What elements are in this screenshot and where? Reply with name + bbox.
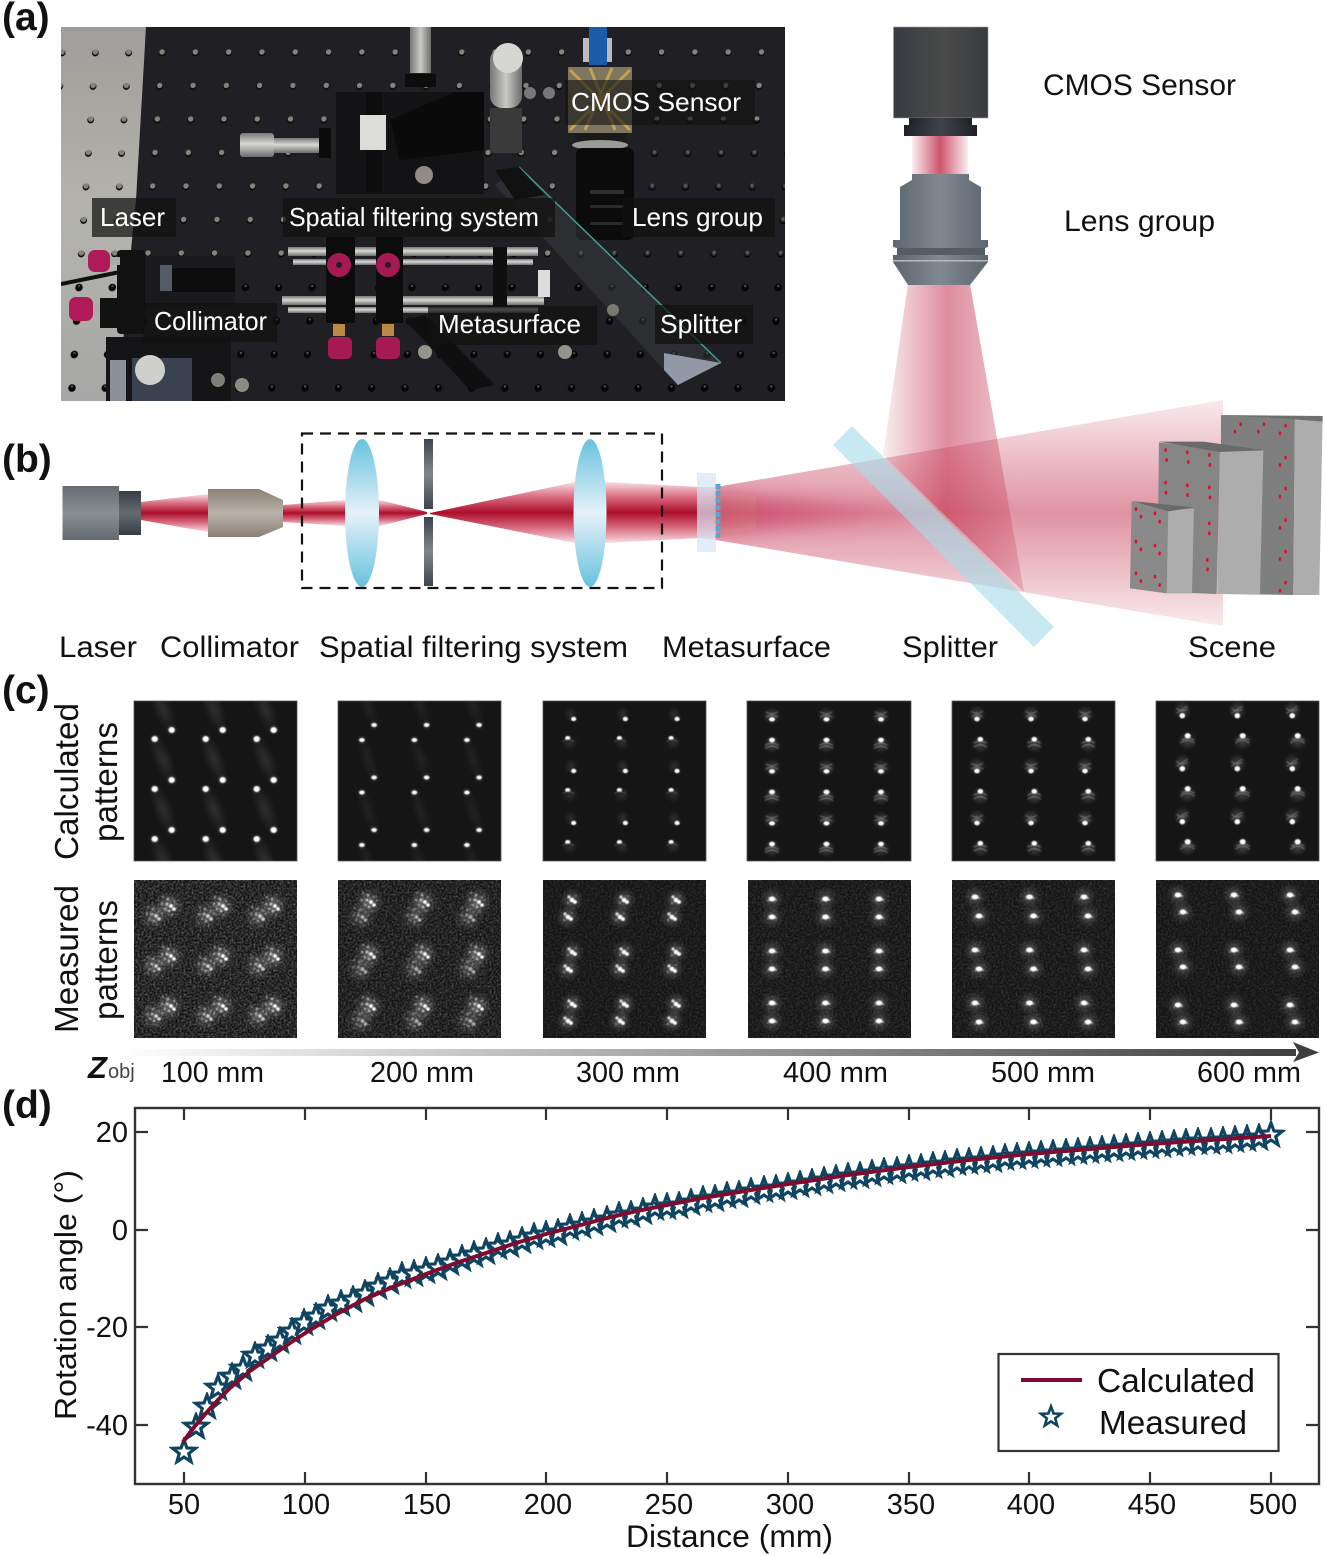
panel label: d: (d) xyxy=(2,1084,52,1127)
lower clamps xyxy=(405,304,619,390)
measured 600 mm xyxy=(1156,880,1319,1038)
lens barrel xyxy=(576,148,634,240)
legend xyxy=(998,1354,1278,1451)
axis label: Z obj: Z xyxy=(87,1050,108,1085)
calculated patterns row xyxy=(134,701,1319,861)
x tick labels: 500 xyxy=(1249,1489,1297,1521)
beam: between sensor and lens group xyxy=(912,135,968,175)
lower left stage xyxy=(106,337,249,401)
collimator xyxy=(208,489,283,537)
x tick labels: 50 xyxy=(168,1489,200,1521)
distance labels: 400 mm xyxy=(783,1057,888,1089)
beam: reflected up to lens xyxy=(883,284,1024,592)
arrow: object distance gradient xyxy=(120,1042,1319,1062)
schematic labels: bottom row: Metasurface xyxy=(662,631,831,664)
x tick labels xyxy=(168,1489,1297,1521)
panel label: b: (b) xyxy=(2,438,52,481)
CMOS sensor camera xyxy=(894,27,988,136)
micrometer top xyxy=(405,27,436,87)
schematic labels: camera: CMOS Sensor xyxy=(1043,69,1236,102)
schematic labels: bottom row xyxy=(59,631,1276,664)
row label: calculated patterns xyxy=(48,703,124,860)
lens 2 xyxy=(574,439,606,587)
distance labels: 100 mm xyxy=(161,1057,264,1089)
schematic labels: bottom row: Scene xyxy=(1188,631,1276,664)
calculated 100 mm xyxy=(134,701,297,861)
schematic labels: bottom row: Spatial filtering system xyxy=(319,631,628,664)
photo labels: Lens group xyxy=(632,202,763,232)
laser xyxy=(62,486,141,540)
optical rails xyxy=(282,247,550,313)
distance labels xyxy=(161,1057,1301,1089)
x tick labels: 150 xyxy=(403,1489,451,1521)
distance labels: 300 mm xyxy=(576,1057,680,1089)
photo labels: CMOS Sensor xyxy=(571,87,741,117)
plot frame and ticks xyxy=(135,1108,1319,1484)
distance labels: 600 mm xyxy=(1197,1057,1301,1089)
schematic labels: bottom row: Collimator xyxy=(160,631,299,664)
axis titles: Rotation angle (°) xyxy=(48,1170,83,1420)
photo labels: Splitter xyxy=(660,309,742,339)
splitter xyxy=(833,426,1054,647)
measured patterns row xyxy=(134,880,1319,1038)
schematic labels: camera xyxy=(1043,69,1236,238)
row label: measured patterns: Measured xyxy=(48,885,85,1033)
calculated 300 mm xyxy=(543,701,706,861)
collimator mount xyxy=(61,250,235,334)
distance labels: 200 mm xyxy=(370,1057,474,1089)
panel label: c: (c) xyxy=(2,669,50,712)
measured 300 mm xyxy=(543,880,706,1038)
panel a: photograph of optical setup xyxy=(61,27,785,401)
beam path: laser to metasurface xyxy=(141,482,716,543)
scene buildings xyxy=(1130,415,1323,595)
line chart: rotation angle vs distance xyxy=(48,1108,1319,1554)
axis label: Z obj: obj xyxy=(108,1061,135,1083)
row label: calculated patterns: Calculated xyxy=(48,703,85,860)
calculated 500 mm xyxy=(952,701,1115,861)
x tick labels: 400 xyxy=(1007,1489,1055,1521)
row label: measured patterns xyxy=(48,885,124,1033)
x tick labels: 450 xyxy=(1128,1489,1176,1521)
measured series: stars xyxy=(184,1135,1271,1452)
calculated 400 mm xyxy=(747,701,911,861)
photo labels: Collimator xyxy=(154,306,267,336)
axis titles xyxy=(48,1170,833,1554)
beam: projected to scene xyxy=(700,400,1223,626)
legend: Calculated xyxy=(1097,1363,1255,1400)
lens posts and knobs xyxy=(326,237,403,359)
x tick labels: 300 xyxy=(766,1489,814,1521)
y tick labels: 20 xyxy=(96,1117,128,1149)
measured 200 mm xyxy=(338,880,501,1038)
splitter plate xyxy=(495,167,721,385)
measured 400 mm xyxy=(748,880,911,1038)
schematic labels: bottom row: Splitter xyxy=(902,631,998,664)
y tick labels: -40 xyxy=(86,1410,128,1442)
camera frame xyxy=(568,67,632,150)
translation stage xyxy=(336,92,484,194)
metasurface xyxy=(697,473,718,552)
photo labels xyxy=(92,80,775,345)
measured 100 mm xyxy=(134,880,297,1038)
schematic labels: camera: Lens group xyxy=(1064,205,1215,238)
lens group xyxy=(893,174,988,285)
projected red dots xyxy=(1135,422,1287,593)
photo labels: Metasurface xyxy=(438,309,581,339)
distance labels: 500 mm xyxy=(991,1057,1095,1089)
y tick labels: -20 xyxy=(86,1312,128,1344)
schematic labels: bottom row: Laser xyxy=(59,631,137,664)
y tick labels: 0 xyxy=(112,1215,128,1247)
measured 500 mm xyxy=(952,880,1115,1038)
axis titles: Distance (mm) xyxy=(626,1518,833,1554)
micrometer left xyxy=(240,128,331,158)
row label: calculated patterns: patterns xyxy=(87,722,124,842)
axis label: Z obj xyxy=(87,1050,135,1085)
calculated 200 mm xyxy=(338,701,501,861)
row label: measured patterns: patterns xyxy=(87,900,124,1020)
x tick labels: 200 xyxy=(524,1489,572,1521)
camera connector xyxy=(583,27,612,65)
x tick labels: 100 xyxy=(282,1489,330,1521)
dashed box: spatial filtering system xyxy=(302,434,662,588)
calculated series: curve xyxy=(183,1136,1271,1442)
x tick labels: 250 xyxy=(645,1489,693,1521)
photo labels: Laser xyxy=(100,202,165,232)
aperture xyxy=(424,439,433,586)
y tick labels xyxy=(86,1117,128,1442)
legend: Measured xyxy=(1099,1405,1247,1442)
lens 1 xyxy=(345,439,379,587)
x tick labels: 350 xyxy=(887,1489,935,1521)
micrometer right xyxy=(490,43,555,153)
photo labels: Spatial filtering system xyxy=(289,202,539,232)
calculated 600 mm xyxy=(1156,701,1319,861)
